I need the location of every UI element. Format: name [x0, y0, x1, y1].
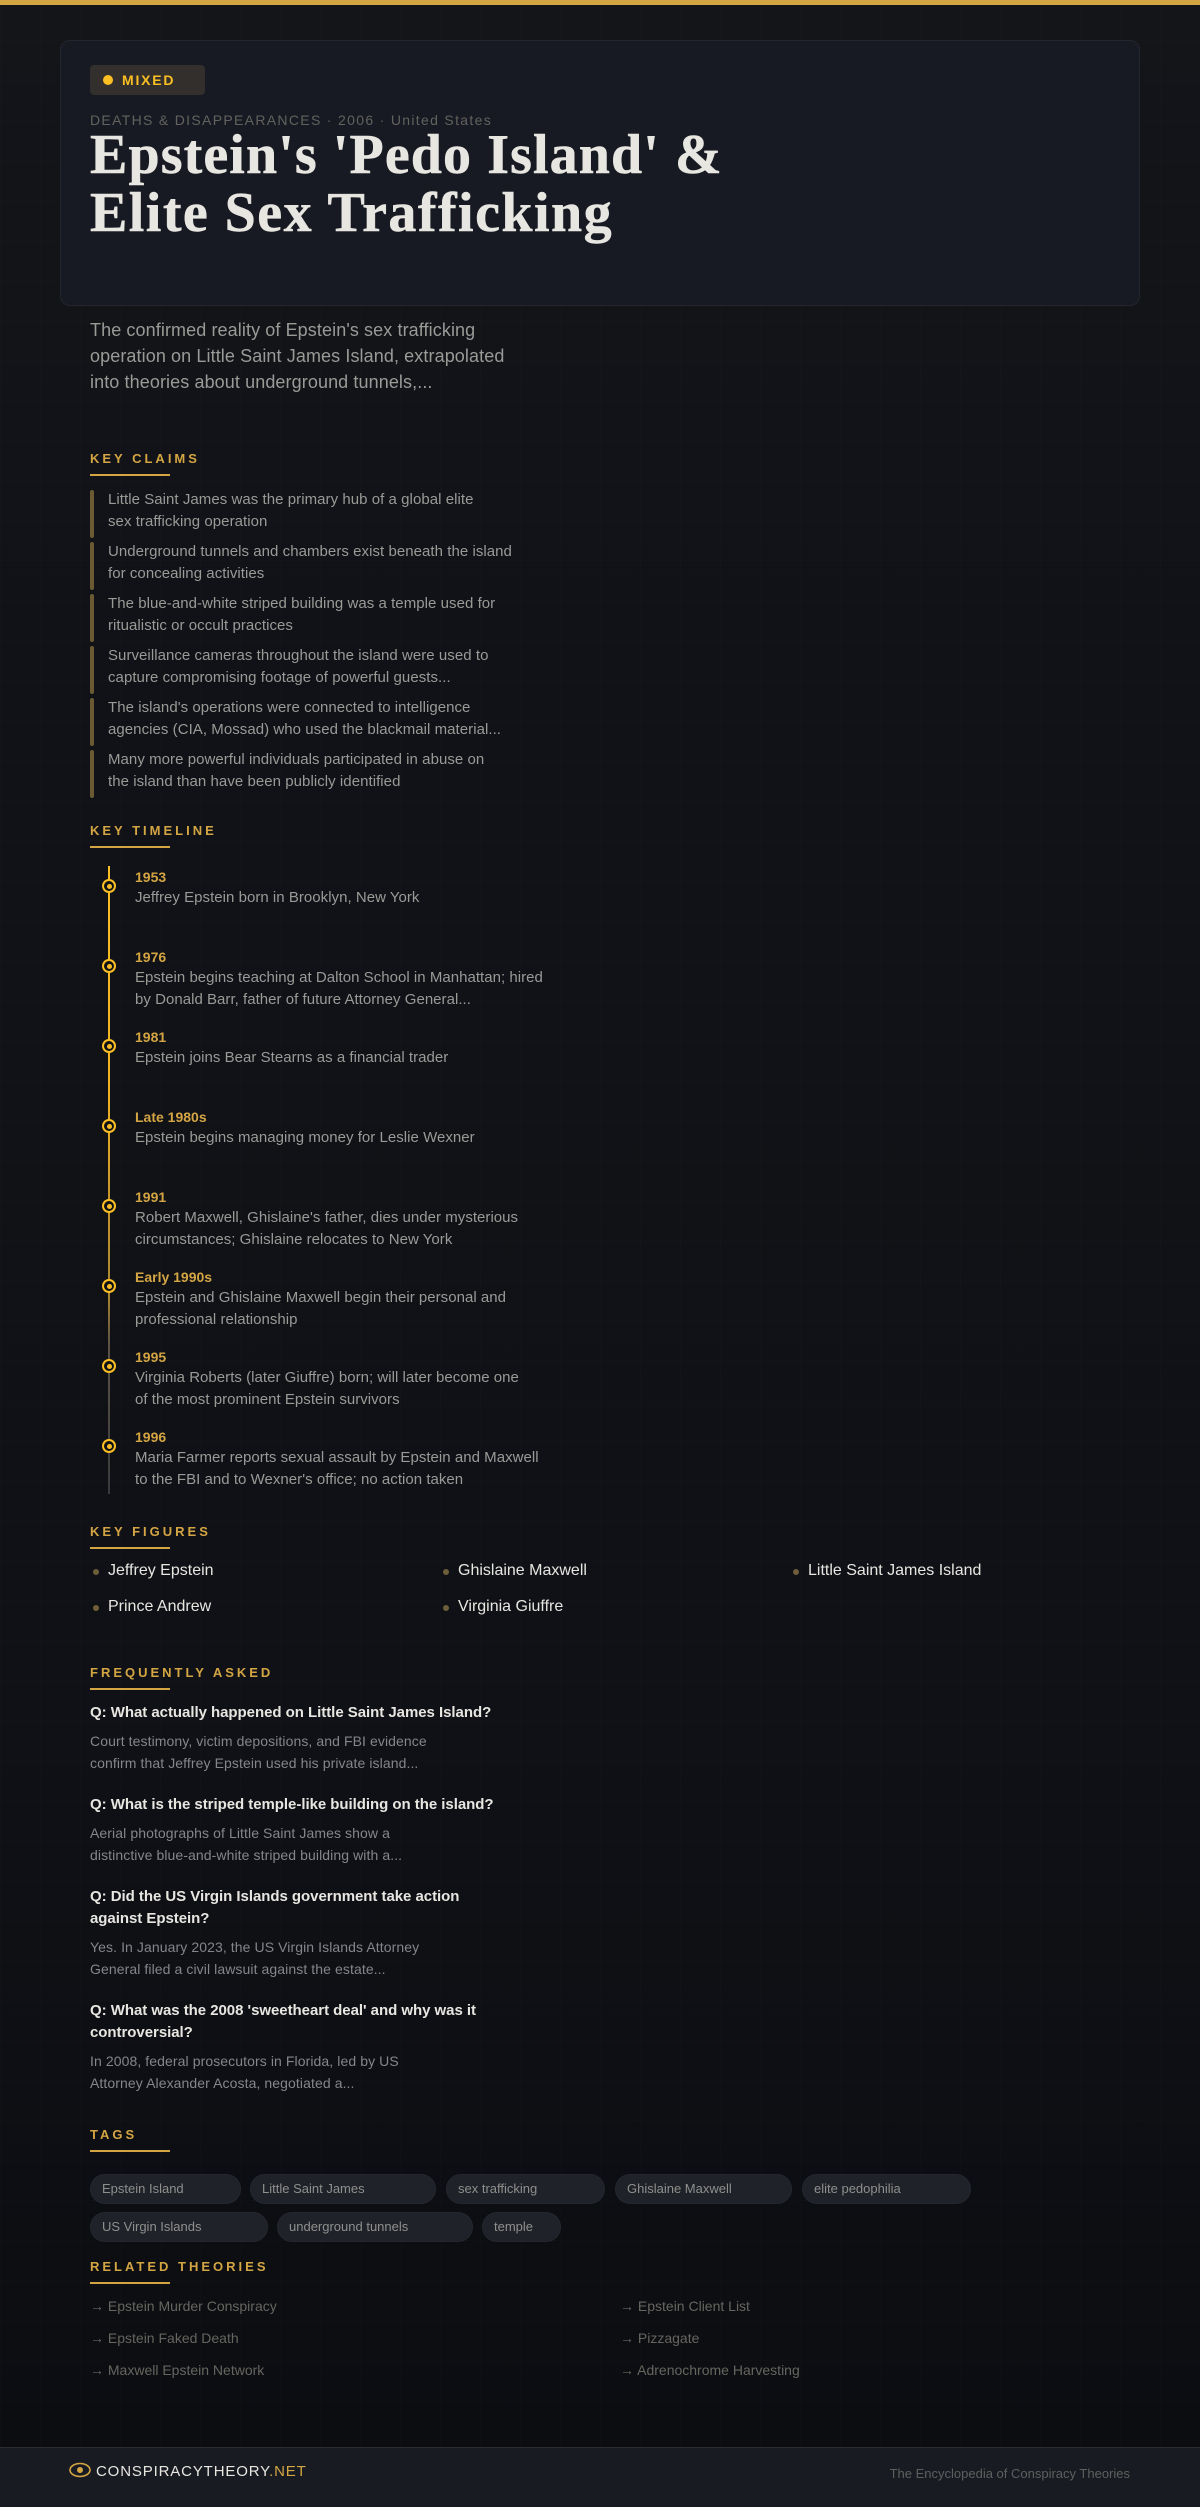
icon: status dot: [103, 75, 113, 85]
faq item 4: Attorney Alexander Acosta, negotiated a...: [90, 2075, 355, 2091]
event 1996: 1996: [135, 1429, 166, 1445]
event 1995: 1995: [135, 1349, 166, 1365]
tag: [802, 2174, 971, 2204]
top accent bar: [0, 0, 1200, 5]
claim 3: The blue-and-white striped building was a temple used for: [108, 595, 495, 612]
tag: Ghislaine Maxwell: [627, 2181, 732, 2196]
summary text: The confirmed reality of Epstein's sex trafficking: [90, 320, 475, 340]
claim 2: for concealing activities: [108, 565, 264, 582]
tag: [250, 2174, 436, 2204]
claim 5: [90, 698, 501, 746]
claim 1: Little Saint James was the primary hub of a global elite: [108, 491, 474, 508]
heading: related theories: RELATED THEORIES: [90, 2259, 268, 2274]
faq item 1: [90, 1704, 491, 1771]
title: Elite Sex Trafficking: [90, 182, 613, 244]
claim 6: Many more powerful individuals participated in abuse on: [108, 751, 484, 768]
tag: [90, 2212, 268, 2242]
heading: frequently asked: FREQUENTLY ASKED: [90, 1665, 273, 1680]
tag: [277, 2212, 473, 2242]
event 1995: Virginia Roberts (later Giuffre) born; will later become one: [135, 1369, 519, 1386]
event early 1990s: professional relationship: [135, 1311, 298, 1328]
footer: [0, 2447, 1200, 2507]
event 1981: Epstein joins Bear Stearns as a financial trader: [135, 1049, 448, 1066]
event 1976: by Donald Barr, father of future Attorney General...: [135, 991, 471, 1008]
summary text: [90, 320, 504, 392]
claim 6: [90, 750, 484, 798]
tag: [90, 2174, 241, 2204]
claim 1: sex trafficking operation: [108, 513, 267, 530]
faq item 3: [90, 1888, 459, 1977]
summary text: into theories about underground tunnels,...: [90, 372, 433, 392]
tag: sex trafficking: [458, 2181, 537, 2196]
figure: Little Saint James Island: Little Saint James Island: [808, 1562, 981, 1579]
claim 2: Underground tunnels and chambers exist beneath the island: [108, 543, 512, 560]
claim 3: [90, 594, 495, 642]
faq item 4: In 2008, federal prosecutors in Florida, led by US: [90, 2053, 399, 2069]
event 1953: Jeffrey Epstein born in Brooklyn, New York: [135, 889, 419, 906]
faq item 4: Q: What was the 2008 'sweetheart deal' and why was it: [90, 2002, 476, 2019]
timeline spine: [108, 866, 110, 1494]
faq item 2: Q: What is the striped temple-like building on the island?: [90, 1796, 494, 1813]
event late 1980s: Late 1980s: [135, 1109, 207, 1125]
related link: → Maxwell Epstein Network: [90, 2362, 264, 2378]
panel: hero header: [60, 40, 1140, 306]
event 1991: Robert Maxwell, Ghislaine's father, dies under mysterious: [135, 1209, 518, 1226]
faq item 3: Q: Did the US Virgin Islands government take action: [90, 1888, 459, 1905]
related link: → Adrenochrome Harvesting: [620, 2362, 800, 2378]
footer tagline: The Encyclopedia of Conspiracy Theories: [890, 2466, 1130, 2481]
title: Epstein's 'Pedo Island' &: [90, 124, 723, 186]
tag: Little Saint James: [262, 2181, 365, 2196]
faq item 4: controversial?: [90, 2024, 193, 2041]
tag: [446, 2174, 605, 2204]
faq item 3: Yes. In January 2023, the US Virgin Islands Attorney: [90, 1939, 419, 1955]
icon: eye logo: [69, 2462, 91, 2478]
tag: [482, 2212, 561, 2242]
event late 1980s: [102, 1109, 475, 1146]
event 1976: Epstein begins teaching at Dalton School in Manhattan; hired: [135, 969, 543, 986]
claim 2: [90, 542, 512, 590]
tag: Epstein Island: [102, 2181, 184, 2196]
related link: → Epstein Client List: [620, 2298, 750, 2314]
category and date line: DEATHS & DISAPPEARANCES · 2006 · United States: [90, 112, 492, 128]
claim 4: Surveillance cameras throughout the island were used to: [108, 647, 488, 664]
event early 1990s: [102, 1269, 506, 1328]
claim 4: capture compromising footage of powerful guests...: [108, 669, 451, 686]
figure: Jeffrey Epstein: Jeffrey Epstein: [108, 1562, 214, 1579]
claim 1: [90, 490, 474, 538]
claim 5: agencies (CIA, Mossad) who used the blackmail material...: [108, 721, 501, 738]
panel: timeline: [102, 866, 543, 1494]
related link: → Epstein Murder Conspiracy: [90, 2298, 277, 2314]
event 1991: 1991: [135, 1189, 166, 1205]
tag: [615, 2174, 792, 2204]
figure: Ghislaine Maxwell: Ghislaine Maxwell: [458, 1562, 587, 1579]
faq item 3: General filed a civil lawsuit against the estate...: [90, 1961, 386, 1977]
faq item 1: Q: What actually happened on Little Saint James Island?: [90, 1704, 491, 1721]
figure: Prince Andrew: Prince Andrew: [108, 1598, 211, 1615]
badge: mixed rating: [90, 65, 205, 95]
badge label: MIXED: [122, 72, 175, 88]
panel: tags: [90, 2174, 971, 2242]
claim 3: ritualistic or occult practices: [108, 617, 293, 634]
event 1991: [102, 1189, 518, 1248]
heading: key figures: KEY FIGURES: [90, 1524, 211, 1539]
panel: key claims list: [90, 490, 512, 798]
site logo text: CONSPIRACYTHEORY.NET: [96, 2463, 307, 2480]
event 1953: 1953: [135, 869, 166, 885]
related link: → Epstein Faked Death: [90, 2330, 239, 2346]
event 1981: [102, 1029, 448, 1066]
event 1976: 1976: [135, 949, 166, 965]
faq item 2: Aerial photographs of Little Saint James show a: [90, 1825, 390, 1841]
faq item 3: against Epstein?: [90, 1910, 209, 1927]
event early 1990s: Early 1990s: [135, 1269, 212, 1285]
tag: underground tunnels: [289, 2219, 408, 2234]
claim 4: [90, 646, 488, 694]
event 1996: Maria Farmer reports sexual assault by Epstein and Maxwell: [135, 1449, 539, 1466]
summary text: operation on Little Saint James Island, extrapolated: [90, 346, 504, 366]
figure: Virginia Giuffre: Virginia Giuffre: [458, 1598, 563, 1615]
event 1953: [102, 869, 420, 906]
claim 5: The island's operations were connected to intelligence: [108, 699, 470, 716]
faq item 2: distinctive blue-and-white striped building with a...: [90, 1847, 402, 1863]
faq item 1: confirm that Jeffrey Epstein used his private island...: [90, 1755, 418, 1771]
panel: related theories: [90, 2298, 800, 2378]
title: [90, 124, 723, 244]
event early 1990s: Epstein and Ghislaine Maxwell begin their personal and: [135, 1289, 506, 1306]
panel: key figures: [93, 1562, 981, 1615]
event 1991: circumstances; Ghislaine relocates to New York: [135, 1231, 452, 1248]
event 1976: [102, 949, 543, 1008]
event 1995: of the most prominent Epstein survivors: [135, 1391, 400, 1408]
related link: → Pizzagate: [620, 2330, 699, 2346]
tag: elite pedophilia: [814, 2181, 901, 2196]
event 1996: [102, 1429, 539, 1488]
heading: tags: TAGS: [90, 2127, 137, 2142]
event 1981: 1981: [135, 1029, 166, 1045]
faq item 4: [90, 2002, 476, 2091]
event late 1980s: Epstein begins managing money for Leslie Wexner: [135, 1129, 475, 1146]
heading: key claims: KEY CLAIMS: [90, 451, 200, 466]
claim 6: the island than have been publicly identified: [108, 773, 400, 790]
tag: temple: [494, 2219, 533, 2234]
event 1996: to the FBI and to Wexner's office; no action taken: [135, 1471, 463, 1488]
faq item 1: Court testimony, victim depositions, and FBI evidence: [90, 1733, 427, 1749]
event 1995: [102, 1349, 519, 1408]
tag: US Virgin Islands: [102, 2219, 201, 2234]
heading: key timeline: KEY TIMELINE: [90, 823, 217, 838]
faq item 2: [90, 1796, 494, 1863]
